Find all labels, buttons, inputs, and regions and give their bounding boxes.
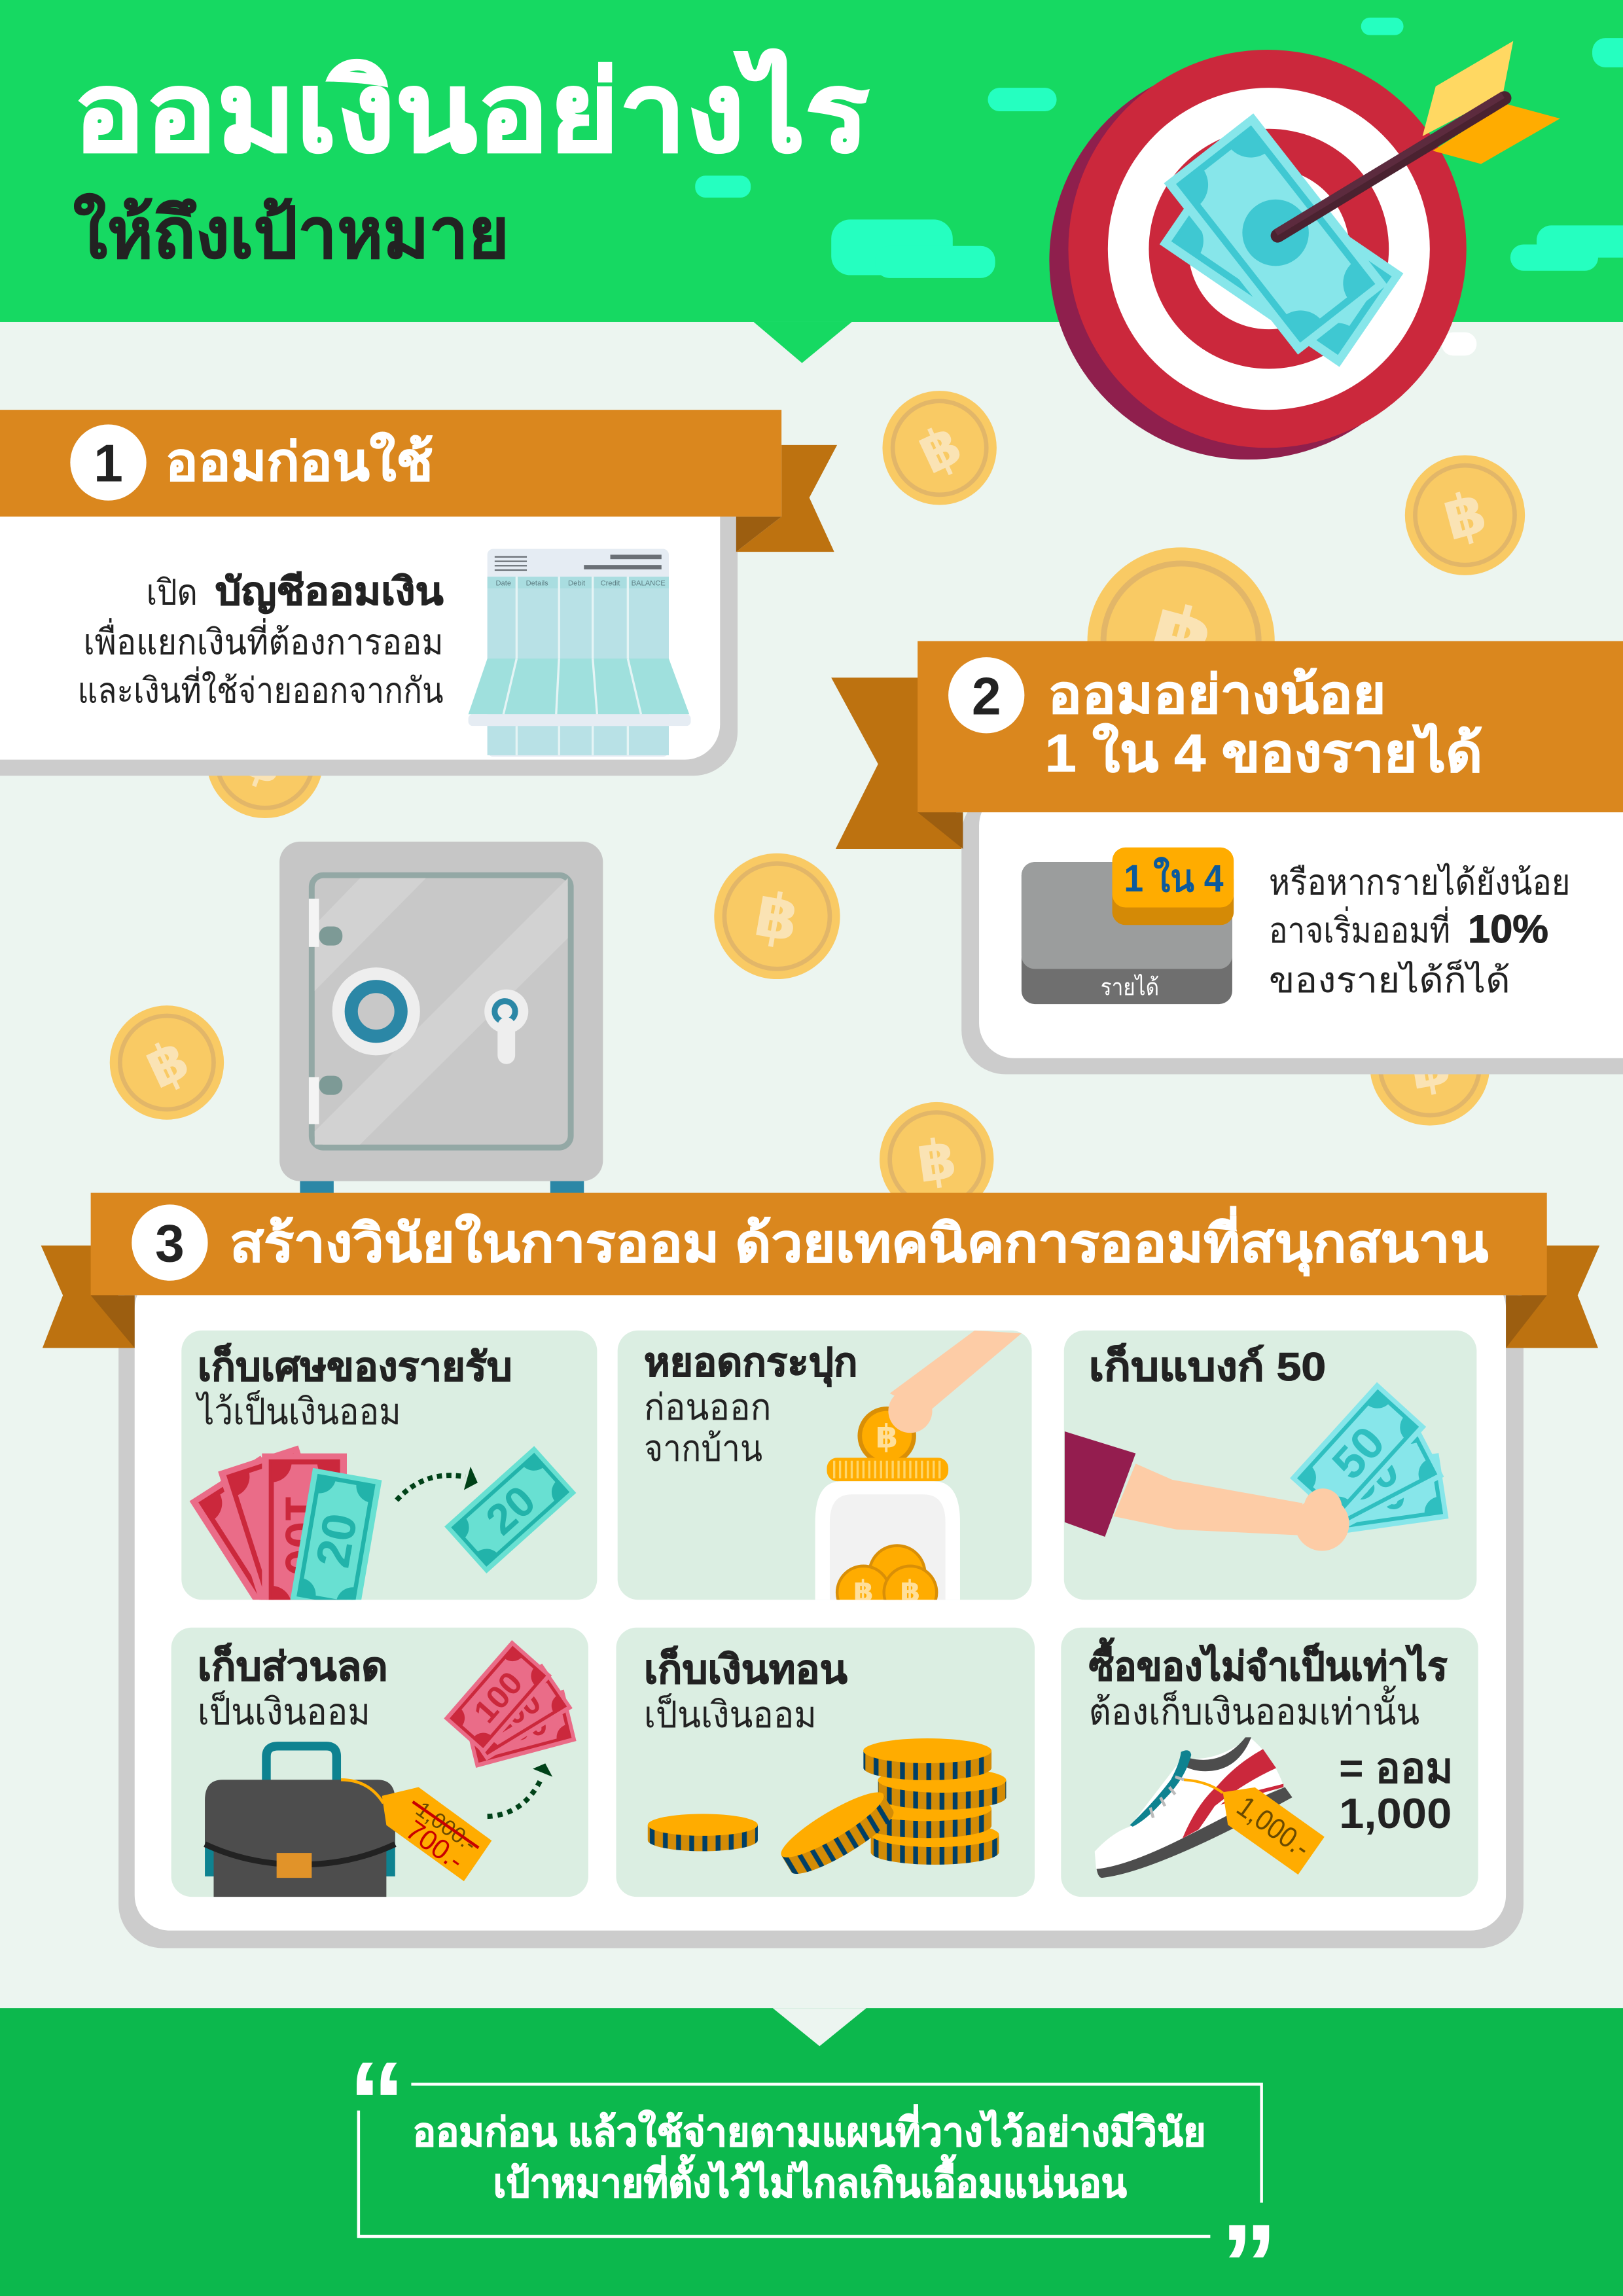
icon: pink notes: 100 (482, 1684, 547, 1741)
icon: jar and hand: ฿ (900, 1575, 921, 1607)
heading: ออมก่อนใช้ (166, 431, 433, 492)
icon: passbook: Date (495, 579, 511, 587)
number badge 2 (948, 657, 1024, 733)
body text: บัญชีออมเงิน (215, 571, 444, 614)
coin: ฿ (750, 880, 804, 954)
body text: หรือหากรายได้ยังน้อย (1269, 862, 1570, 902)
card: match spending: ซื้อของไม่จำเป็นเท่าไร (1089, 1638, 1448, 1689)
card: keep discounts: เก็บส่วนลด (198, 1643, 388, 1689)
closing message: ออมก่อน แล้วใช้จ่ายตามแผนที่วางไว้อย่างมีวินัย (413, 2104, 1206, 2154)
icon: passbook: Debit (568, 579, 586, 587)
savings amount (1339, 1744, 1454, 1837)
coin (714, 853, 840, 979)
icon: passbook: Credit (601, 579, 620, 587)
number badge 2: 2 (972, 667, 1001, 726)
price tag (382, 1787, 491, 1881)
icon: jar and hand (815, 1331, 1022, 1619)
icon: hand holding notes: 50 (1323, 1417, 1395, 1489)
icon: coin stack (775, 1738, 1006, 1874)
ribbon tail (736, 445, 837, 552)
icon: sneaker with tag: 1,000.- (1231, 1791, 1316, 1864)
body text: เปิด (147, 573, 198, 613)
icon: jar and hand: ฿ (853, 1575, 874, 1607)
icon: one in four income block: รายได้ (1101, 974, 1159, 1001)
card: keep leftover income: เก็บเศษของรายรับ (198, 1343, 512, 1389)
coin (880, 1102, 993, 1216)
number badge 3 (132, 1204, 208, 1281)
icon: banknotes fan (190, 1445, 382, 1600)
card: keep change: เป็นเงินออม (644, 1693, 817, 1735)
coin (882, 391, 997, 505)
body text (78, 571, 444, 710)
card: keep discounts (171, 1628, 588, 1917)
arrow (397, 1467, 478, 1500)
card: match spending: ต้องเก็บเงินออมเท่านั้น (1089, 1685, 1419, 1732)
card: keep leftover income (181, 1330, 597, 1600)
panel: step 3 (41, 1193, 1599, 1948)
icon: passbook: BALANCE (632, 579, 666, 587)
icon: pink notes: 100 (490, 1705, 550, 1753)
panel: step 1 (0, 410, 837, 776)
card: keep 50 baht notes: เก็บแบงก์ 50 (1089, 1343, 1326, 1389)
card: coin before leaving home: ก่อนออก (644, 1386, 772, 1427)
icon: banknote 20: 20 (477, 1477, 544, 1544)
card: coin before leaving home: หยอดกระปุก (644, 1340, 857, 1387)
icon: single coin (648, 1814, 758, 1851)
body text: อาจเริ่มออมที่ (1269, 906, 1450, 950)
coin (206, 701, 323, 818)
body text: เพื่อแยกเงินที่ต้องการออม (83, 618, 444, 662)
icon: hand holding notes: 50 (1338, 1443, 1406, 1512)
icon: briefcase (205, 1746, 395, 1917)
icon: hand holding notes (1065, 1369, 1459, 1551)
clouds (695, 18, 1623, 355)
card: keep 50 baht notes (1064, 1331, 1476, 1600)
coin: ฿ (1137, 585, 1224, 699)
coin (110, 1005, 224, 1120)
card: keep discounts: เป็นเงินออม (198, 1689, 370, 1732)
body text: ของรายได้ก็ได้ (1269, 960, 1510, 1000)
coin: ฿ (236, 726, 293, 797)
coin: ฿ (137, 1028, 198, 1101)
coin (1088, 547, 1275, 735)
icon: safe (279, 842, 603, 1194)
title: ออมเงินอย่างไร (73, 49, 869, 175)
card: keep change: เก็บเงินทอน (644, 1646, 847, 1692)
quote frame (359, 2084, 1262, 2236)
coin: ฿ (1404, 1030, 1455, 1102)
coin (1370, 1005, 1490, 1126)
savings amount: = ออม (1339, 1744, 1454, 1792)
number badge 1 (70, 425, 147, 501)
footer band (0, 2008, 1623, 2296)
card: keep leftover income: ไว้เป็นเงินออม (195, 1390, 401, 1432)
subtitle: ให้ถึงเป้าหมาย (73, 194, 509, 273)
coin: ฿ (914, 1128, 960, 1194)
icon: pink notes (434, 1630, 585, 1776)
coin: ฿ (1437, 478, 1493, 552)
icon: jar and hand: ฿ (876, 1419, 898, 1455)
icon: target with bill and arrow (1049, 41, 1560, 459)
heading: ออมอย่างน้อย (1048, 666, 1386, 725)
icon: passbook (469, 549, 691, 757)
heading: 1 ใน 4 ของรายได้ (1045, 723, 1482, 783)
icon: hand holding notes: 50 (1351, 1467, 1409, 1524)
price tag: 1,000.- (411, 1797, 481, 1857)
heading (1045, 666, 1482, 783)
icon: sneaker with tag (1095, 1737, 1325, 1878)
card: keep change (616, 1628, 1035, 1897)
panel: step 2 (831, 641, 1623, 1074)
body text: 10% (1468, 906, 1548, 951)
ribbon tails (41, 1246, 1599, 1348)
body text: และเงินที่ใช้จ่ายออกจากกัน (78, 666, 444, 710)
icon: banknote 20 (433, 1434, 588, 1585)
icon: one in four income block: 1 ใน 4 (1124, 856, 1224, 900)
ribbon tail (831, 677, 961, 849)
coin (1405, 455, 1525, 575)
quote mark open: “ (348, 2038, 405, 2166)
arrow (488, 1763, 552, 1816)
card: coin before leaving home (618, 1331, 1032, 1619)
price tag: 700.- (400, 1815, 469, 1876)
header band (0, 0, 1623, 363)
icon: passbook: Details (526, 579, 548, 587)
heading: สร้างวินัยในการออม ด้วยเทคนิคการออมที่สนุกสนาน (230, 1206, 1488, 1277)
number badge 3: 3 (155, 1215, 185, 1274)
card: match spending (1061, 1628, 1478, 1897)
icon: pink notes: 100 (467, 1665, 529, 1730)
icon: banknotes fan: 20 (306, 1509, 367, 1571)
number badge 1: 1 (94, 435, 123, 493)
coin: ฿ (910, 413, 971, 486)
savings amount: 1,000 (1339, 1789, 1452, 1837)
closing message (413, 2104, 1206, 2206)
body text (1269, 862, 1570, 1000)
icon: one in four income block (1022, 848, 1234, 1004)
card: coin before leaving home: จากบ้าน (644, 1427, 762, 1469)
closing message: เป้าหมายที่ตั้งไว้ไม่ไกลเกินเอื้อมแน่นอน (493, 2155, 1127, 2206)
icon: banknotes fan: 100 (276, 1494, 330, 1576)
